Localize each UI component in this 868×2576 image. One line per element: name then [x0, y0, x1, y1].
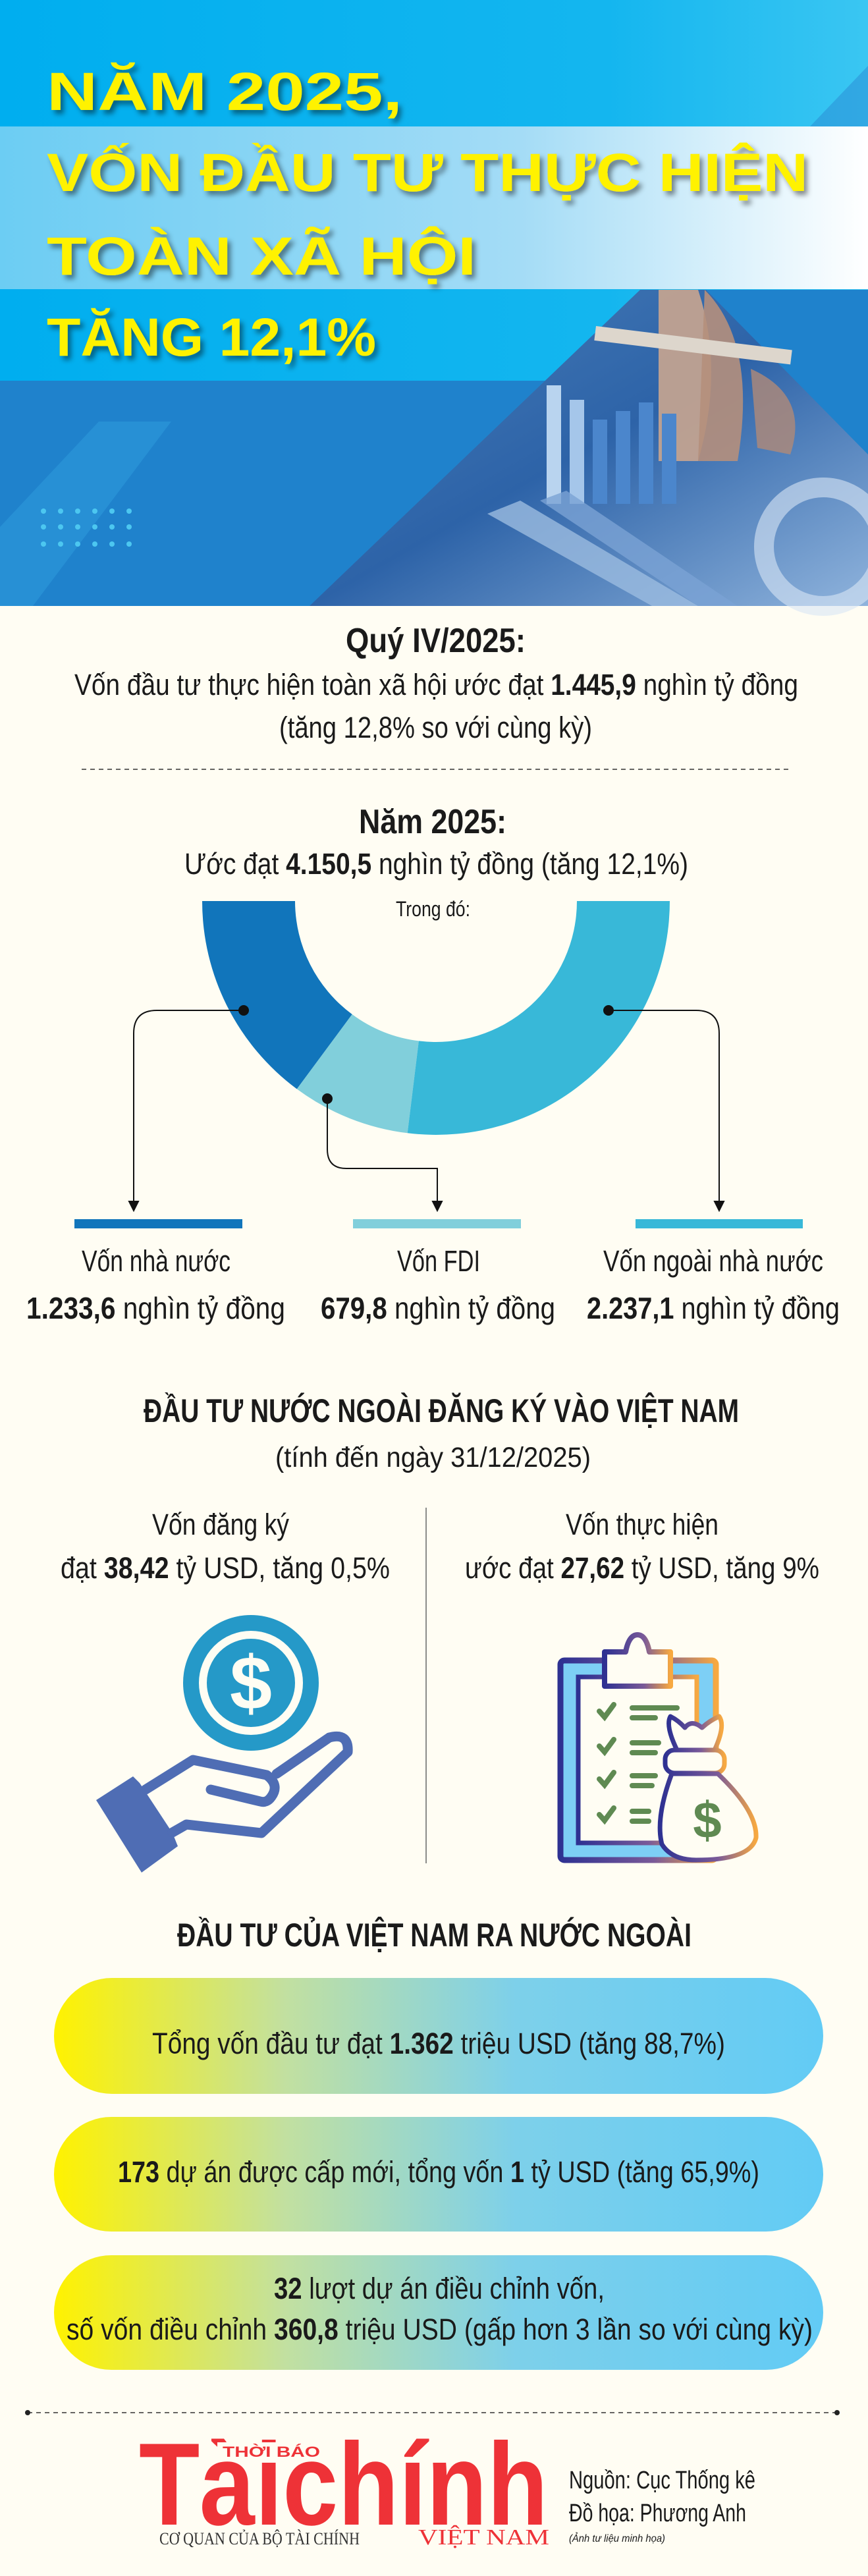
panel: registered capital: [61, 1508, 390, 1873]
heading: Năm 2025: Năm 2025:: [359, 803, 506, 841]
legend: Vốn nhà nước: [26, 1219, 285, 1325]
icon: clipboard with money bag: $: [693, 1791, 722, 1849]
text: source credits: (Ảnh tư liệu minh họa): [569, 2532, 665, 2544]
legend: Vốn ngoài nhà nước: Vốn ngoài nhà nước: [603, 1244, 823, 1278]
heading: Quý IV/2025: Quý IV/2025:: [346, 622, 526, 660]
section: quarter IV: [74, 622, 798, 744]
title: VỐN ĐẦU TƯ THỰC HIỆN: [47, 143, 808, 203]
title: TOÀN XÃ HỘI: [47, 227, 476, 287]
title: [47, 62, 808, 368]
logo: Thời báo Tài chính Việt Nam: VIỆT NAM: [418, 2525, 549, 2550]
heading: FDI into Vietnam: [144, 1392, 739, 1473]
legend: Vốn FDI: 679,8 nghìn tỷ đồng: [321, 1291, 555, 1325]
header photo: [310, 290, 868, 606]
pill: total capital: [54, 1978, 823, 2094]
logo: Thời báo Tài chính Việt Nam: Tàichính: [139, 2419, 548, 2550]
panel: implemented capital: Vốn thực hiện: [566, 1508, 719, 1541]
legend: Vốn ngoài nhà nước: 2.237,1 nghìn tỷ đồng: [587, 1291, 840, 1325]
heading: Vietnam outward investment: ĐẦU TƯ CỦA VIỆT NAM RA NƯỚC NGOÀI: [177, 1916, 692, 1954]
icon: clipboard with money bag: [560, 1635, 756, 1860]
panel: registered capital: đạt 38,42 tỷ USD, tăng 0,5%: [61, 1551, 390, 1585]
text: source credits: [569, 2467, 755, 2544]
legend: Vốn FDI: Vốn FDI: [397, 1244, 480, 1278]
title: NĂM 2025,: [47, 62, 402, 122]
decorative dots: [41, 508, 132, 547]
arrow: state capital connector: [129, 1006, 248, 1211]
legend: Vốn nhà nước: 1.233,6 nghìn tỷ đồng: [26, 1291, 285, 1325]
text: quarter growth: (tăng 12,8% so với cùng kỳ): [279, 711, 592, 744]
legend: Vốn ngoài nhà nước: [587, 1219, 840, 1325]
title: TĂNG 12,1%: [47, 308, 376, 368]
pill: total capital: Tổng vốn đầu tư đạt 1.362 triệu USD (tăng 88,7%): [152, 2027, 725, 2060]
logo: Thời báo Tài chính Việt Nam: CƠ QUAN CỦA BỘ TÀI CHÍNH: [159, 2529, 360, 2548]
chart: half donut: [202, 901, 670, 1135]
text: annual value: Ước đạt 4.150,5 nghìn tỷ đồng (tăng 12,1%): [184, 847, 688, 881]
pill: adjusted projects: [54, 2255, 823, 2370]
section: year 2025: [184, 803, 688, 921]
icon: coin in hand: $: [230, 1641, 272, 1726]
logo: Thời báo Tài chính Việt Nam: THỜI BÁO: [223, 2444, 320, 2460]
text: quarter value: Vốn đầu tư thực hiện toàn xã hội ước đạt 1.445,9 nghìn tỷ đồng: [74, 668, 798, 701]
arrow: FDI connector: [323, 1094, 442, 1211]
legend: Vốn nhà nước: Vốn nhà nước: [82, 1244, 231, 1278]
header banner: [0, 0, 868, 606]
pill: adjusted projects: số vốn điều chỉnh 360,8 triệu USD (gấp hơn 3 lần so với cùng kỳ): [67, 2313, 813, 2346]
panel: registered capital: Vốn đăng ký: [152, 1508, 289, 1541]
icon: coin in hand: [96, 1615, 348, 1873]
pill: new projects: 173 dự án được cấp mới, tổng vốn 1 tỷ USD (tăng 65,9%): [118, 2155, 759, 2189]
pill: new projects: [54, 2117, 823, 2232]
panel: implemented capital: [465, 1508, 819, 1860]
text: source credits: Nguồn: Cục Thống kê: [569, 2467, 755, 2494]
text: source credits: Đồ họa: Phương Anh: [569, 2500, 746, 2527]
arrow: non-state connector: [604, 1006, 724, 1211]
panel: implemented capital: ước đạt 27,62 tỷ USD, tăng 9%: [465, 1551, 819, 1585]
legend: Vốn FDI: [321, 1219, 555, 1325]
text: trong đó: Trong đó:: [396, 897, 470, 921]
pill: adjusted projects: 32 lượt dự án điều chỉnh vốn,: [274, 2272, 605, 2305]
heading: FDI into Vietnam: (tính đến ngày 31/12/2025): [275, 1442, 591, 1473]
